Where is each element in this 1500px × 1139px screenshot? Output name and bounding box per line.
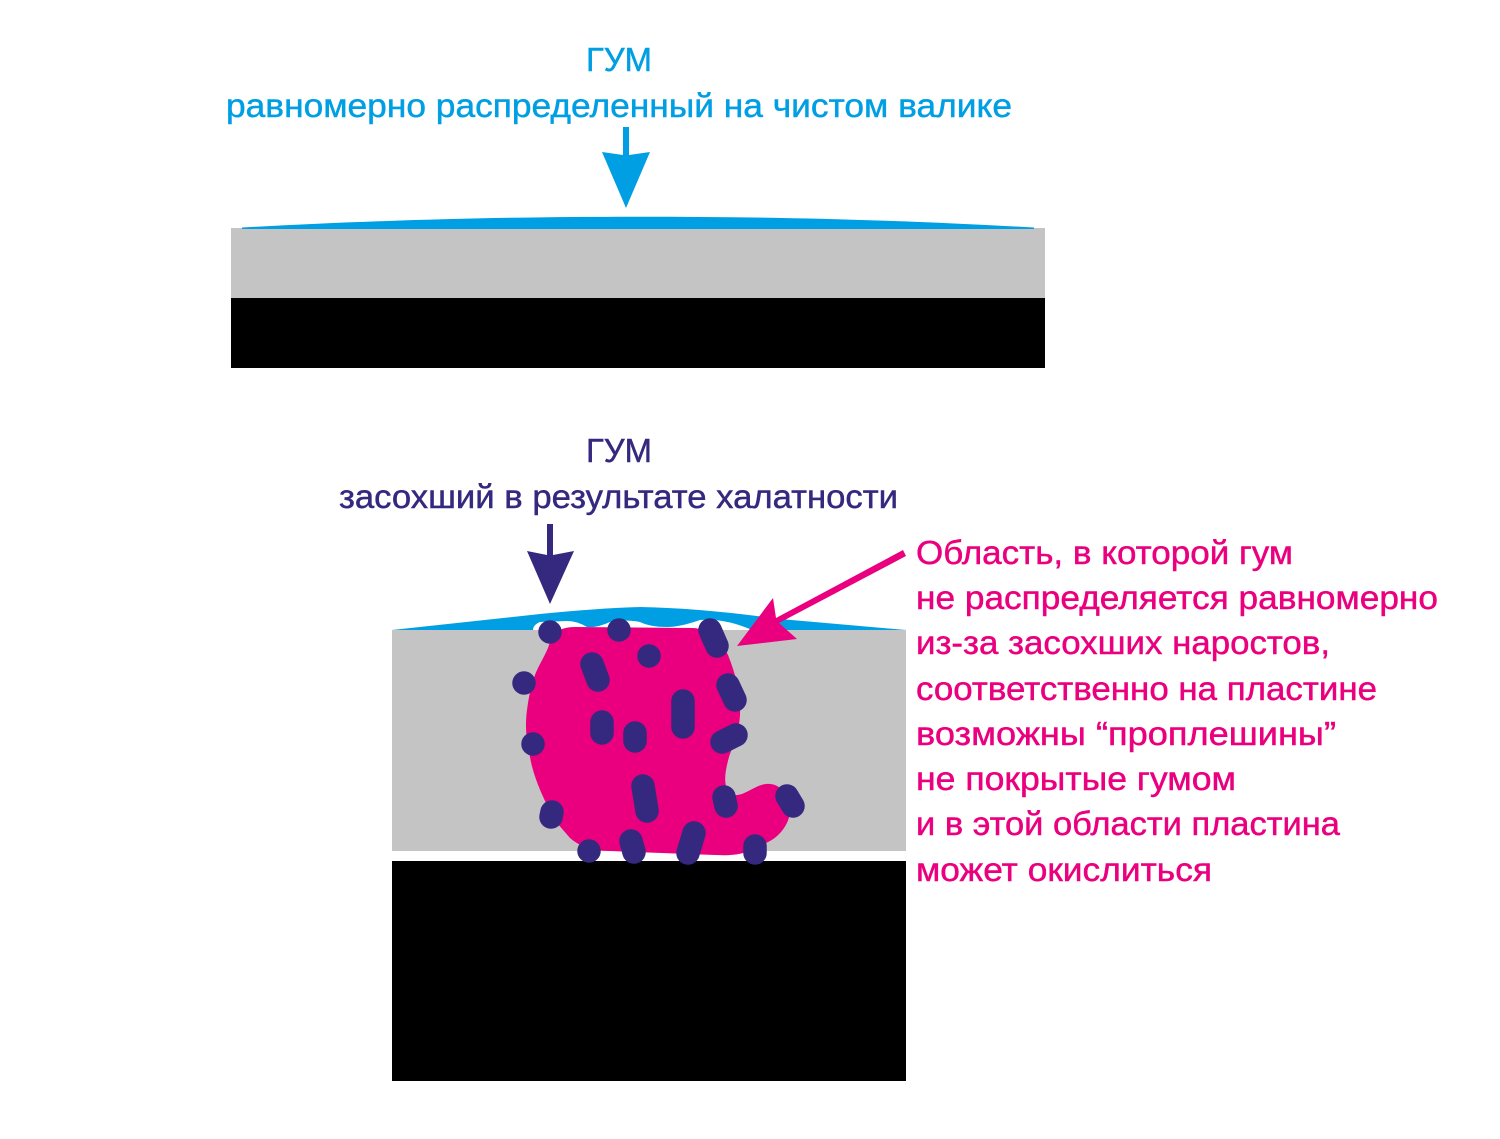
- dried gum particles: [524, 630, 793, 853]
- pink explanation text: возможны “проплешины”: [916, 715, 1336, 752]
- pink dried area: [526, 627, 790, 855]
- top heading: ГУМ: [586, 41, 652, 78]
- dark arrow: [527, 524, 574, 604]
- uneven gum layer: [392, 607, 906, 630]
- blue arrow: [602, 127, 650, 208]
- bottom diagram: dried gum: [339, 432, 1438, 1081]
- pink explanation text: и в этой области пластина: [916, 805, 1341, 842]
- top heading: равномерно распределенный на чистом валике: [226, 87, 1012, 124]
- pink explanation text: не покрытые гумом: [916, 760, 1236, 797]
- bottom heading: [339, 432, 898, 515]
- pink explanation text: может окислиться: [916, 851, 1212, 888]
- bottom heading: засохший в результате халатности: [339, 478, 898, 515]
- grey roller layer: [392, 630, 906, 851]
- pink explanation text: соответственно на пластине: [916, 670, 1377, 707]
- black roller base: [392, 861, 906, 1081]
- even gum layer: [242, 217, 1034, 229]
- grey roller layer: [231, 228, 1045, 298]
- pink explanation text: из-за засохших наростов,: [916, 624, 1330, 661]
- top heading: [226, 41, 1012, 124]
- pink arrow: [737, 550, 906, 646]
- bottom heading: ГУМ: [586, 432, 652, 469]
- pink explanation text: Область, в которой гум: [916, 534, 1293, 571]
- top diagram: gum on clean roller: [226, 41, 1045, 368]
- pink explanation text: не распределяется равномерно: [916, 579, 1438, 616]
- black roller base: [231, 298, 1045, 368]
- pink explanation text: [916, 534, 1438, 888]
